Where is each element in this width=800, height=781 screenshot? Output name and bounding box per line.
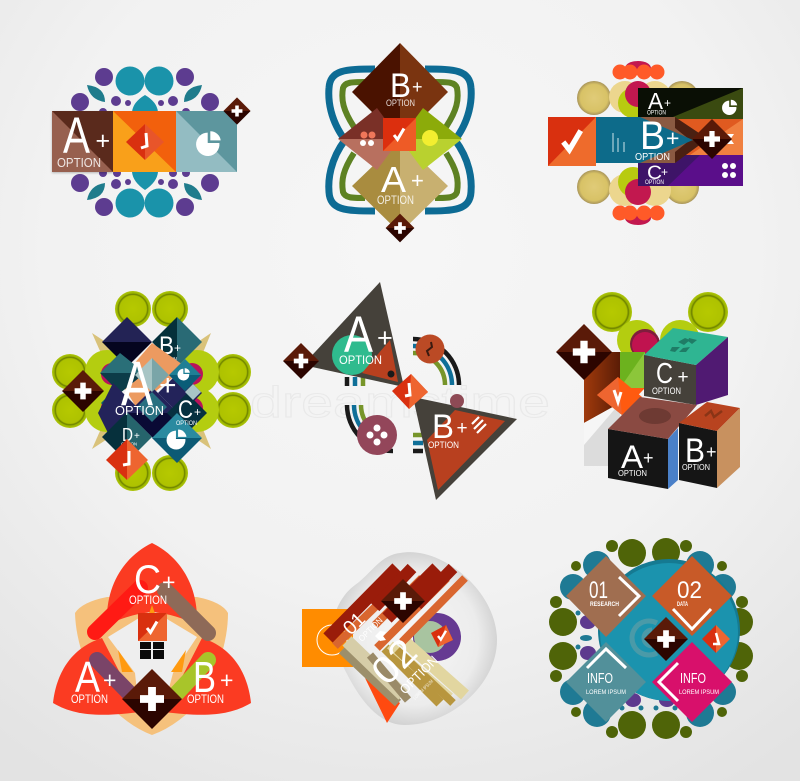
magenta info diamond [652, 642, 732, 722]
A+ C+ labels: OPTION [115, 403, 164, 418]
grey blob [333, 552, 497, 725]
A+ C+ labels: OPTION [176, 421, 197, 427]
A+ bar: A [648, 88, 664, 114]
A+ diamond [352, 140, 448, 233]
B+ diamond: + [412, 77, 423, 97]
C+ cube: C [656, 358, 673, 390]
red triangle [365, 678, 400, 723]
A+ C+ labels [115, 349, 201, 427]
rust circle icon [416, 334, 444, 364]
panel: option strip with flower backdrop [52, 66, 251, 218]
icon: plus diamond [386, 214, 414, 242]
blue pie diamond [169, 359, 201, 391]
magenta info diamond: INFO [680, 671, 706, 687]
panel: horizontal A B C bars [548, 61, 743, 225]
pie diamond [152, 413, 202, 463]
panel: isometric cubes [556, 292, 740, 489]
tan ribbons [342, 640, 465, 703]
labels A B C [71, 558, 233, 706]
A+ cube: A [621, 439, 644, 475]
icon: plus diamond [283, 343, 319, 379]
C+ bar: C [647, 163, 662, 184]
icon: plus diamond [556, 324, 612, 380]
labels A B C: OPTION [71, 694, 108, 706]
B+ diamond [152, 317, 202, 367]
green circle backdrop [52, 291, 251, 491]
A+ cube: OPTION [618, 468, 647, 478]
A+ cube [608, 397, 697, 489]
icon: plus diamond [122, 669, 182, 729]
check square [383, 118, 416, 151]
B+ cube: + [706, 442, 717, 462]
check square [548, 117, 596, 166]
teal info diamond [566, 642, 646, 722]
02 data diamond [652, 556, 732, 636]
A+ bar [638, 88, 743, 119]
A+ triangle: OPTION [339, 353, 382, 367]
A+ option square: OPTION [57, 155, 101, 170]
orange accents [118, 605, 186, 672]
A+ bar: OPTION [647, 110, 666, 116]
A+ C+ labels: A [121, 349, 153, 419]
check diamond [597, 377, 642, 415]
C+ bar: OPTION [645, 180, 664, 186]
dark teal clover [560, 551, 736, 727]
B+ bar [596, 114, 693, 163]
labels A B C: OPTION [187, 694, 224, 706]
B+ diamond: B [159, 332, 174, 360]
panel: triangle layout [283, 282, 517, 500]
icon: plus diamond [644, 617, 688, 661]
maroon circle icon [357, 415, 397, 455]
B+ diamond: OPTION [157, 357, 177, 363]
orange square [302, 609, 353, 667]
01 label [339, 608, 386, 643]
teal info diamond: INFO [587, 671, 613, 687]
magenta info diamond: LOREM IPSUM [679, 690, 719, 696]
folded ribbon [584, 352, 645, 466]
check square [138, 613, 167, 641]
labels A B C: + [103, 667, 116, 693]
B+ bar: OPTION [635, 152, 670, 163]
A+ option square: A [63, 107, 90, 164]
middle orange bar [675, 119, 743, 155]
A+ triangle [303, 282, 404, 387]
02 data diamond: DATA [677, 601, 688, 608]
check diamond [702, 625, 730, 653]
A+ triangle: + [377, 323, 393, 353]
B+ diamond [352, 43, 448, 140]
A+ triangle: A [344, 306, 373, 363]
02 label: OPTION [397, 653, 441, 697]
check diamond [392, 374, 428, 409]
02 label [364, 631, 441, 701]
C+ cube: + [678, 367, 689, 388]
A+ diamond: A [381, 159, 406, 200]
02 label: LOREM IPSUM [412, 679, 435, 701]
panel: diagonal ribbons on grey blob [302, 552, 497, 725]
purple ring with check [413, 613, 461, 661]
B+ triangle: B [432, 408, 454, 446]
02 label: 02 [364, 631, 426, 693]
A+ C+ labels: + [194, 405, 201, 419]
center diamonds [98, 343, 207, 443]
teal info diamond: LOREM IPSUM [586, 690, 626, 696]
orange square with check diamond [113, 111, 176, 172]
labels A B C: + [162, 569, 175, 595]
labels A B C: + [220, 667, 233, 693]
A+ option square: + [96, 127, 110, 155]
B+ bar: B [640, 114, 665, 158]
A+ C+ labels: + [159, 369, 177, 402]
C+ cube: OPTION [652, 386, 681, 396]
01 label: OPTION [356, 615, 385, 643]
check diamond [106, 439, 148, 480]
01 research diamond: 01 [589, 577, 608, 604]
A+ cube: + [643, 448, 654, 468]
teal and purple circle backdrop [71, 66, 219, 218]
D+ diamond: D [122, 425, 133, 445]
B+ diamond: B [390, 67, 411, 105]
01 research diamond: RESEARCH [590, 601, 619, 608]
D+ diamond [102, 412, 152, 462]
B+ diamond: OPTION [386, 98, 415, 109]
icon: plus diamond [223, 97, 251, 125]
navy diamond [102, 317, 152, 367]
red ribbons [328, 568, 465, 648]
icon: plus diamond [692, 119, 732, 159]
labels A B C: OPTION [129, 595, 167, 607]
C+ cube [644, 328, 728, 405]
icon: plus diamond [62, 370, 104, 412]
red petals [53, 543, 251, 715]
panel: diamond cluster A B C D [52, 291, 251, 491]
A+ C+ labels: C [178, 396, 193, 424]
D+ diamond: + [134, 431, 140, 442]
circle backdrop [577, 61, 699, 225]
B+ triangle [413, 394, 517, 500]
green circles [592, 292, 728, 360]
C+ bar: + [661, 165, 668, 179]
labels A B C: B [193, 653, 216, 702]
labels A B C: A [75, 653, 101, 702]
rounded bars [95, 588, 208, 697]
left diamond with dots icon [338, 108, 400, 170]
watermark: dreamstime [250, 378, 550, 427]
02 data diamond: 02 [677, 577, 702, 604]
B+ diamond: + [174, 341, 181, 355]
B+ cube: B [685, 432, 705, 470]
A+ diamond: OPTION [377, 194, 414, 207]
icon: window grid [140, 642, 164, 659]
labels A B C: C [134, 558, 161, 602]
B+ bar: + [666, 125, 679, 151]
petal outlines [329, 69, 471, 211]
A+ option square [52, 107, 113, 172]
B+ cube [679, 402, 740, 488]
green dot ring [549, 538, 753, 739]
purple and teal accents [576, 610, 678, 710]
D+ diamond: OPTION [121, 442, 137, 446]
B+ triangle: OPTION [428, 440, 459, 451]
01 label: 01 [339, 608, 370, 640]
A+ bar: + [664, 96, 671, 110]
C+ bar [638, 155, 743, 186]
right diamond with pie icon [400, 108, 462, 170]
brown connector bands [640, 117, 705, 163]
teal square with pie icon [176, 111, 237, 172]
B+ triangle: + [456, 418, 468, 439]
panel: three petal layout [53, 543, 251, 735]
arcs [347, 339, 459, 451]
panel: four info diamonds on circle [549, 538, 753, 739]
big teal circle [598, 559, 740, 701]
tan ring [75, 597, 228, 735]
icon: plus diamond [381, 579, 425, 623]
A+ diamond: + [411, 168, 424, 193]
B+ cube: OPTION [682, 462, 710, 472]
panel: four diamonds with petal outlines [329, 43, 471, 242]
01 research diamond [566, 556, 646, 637]
